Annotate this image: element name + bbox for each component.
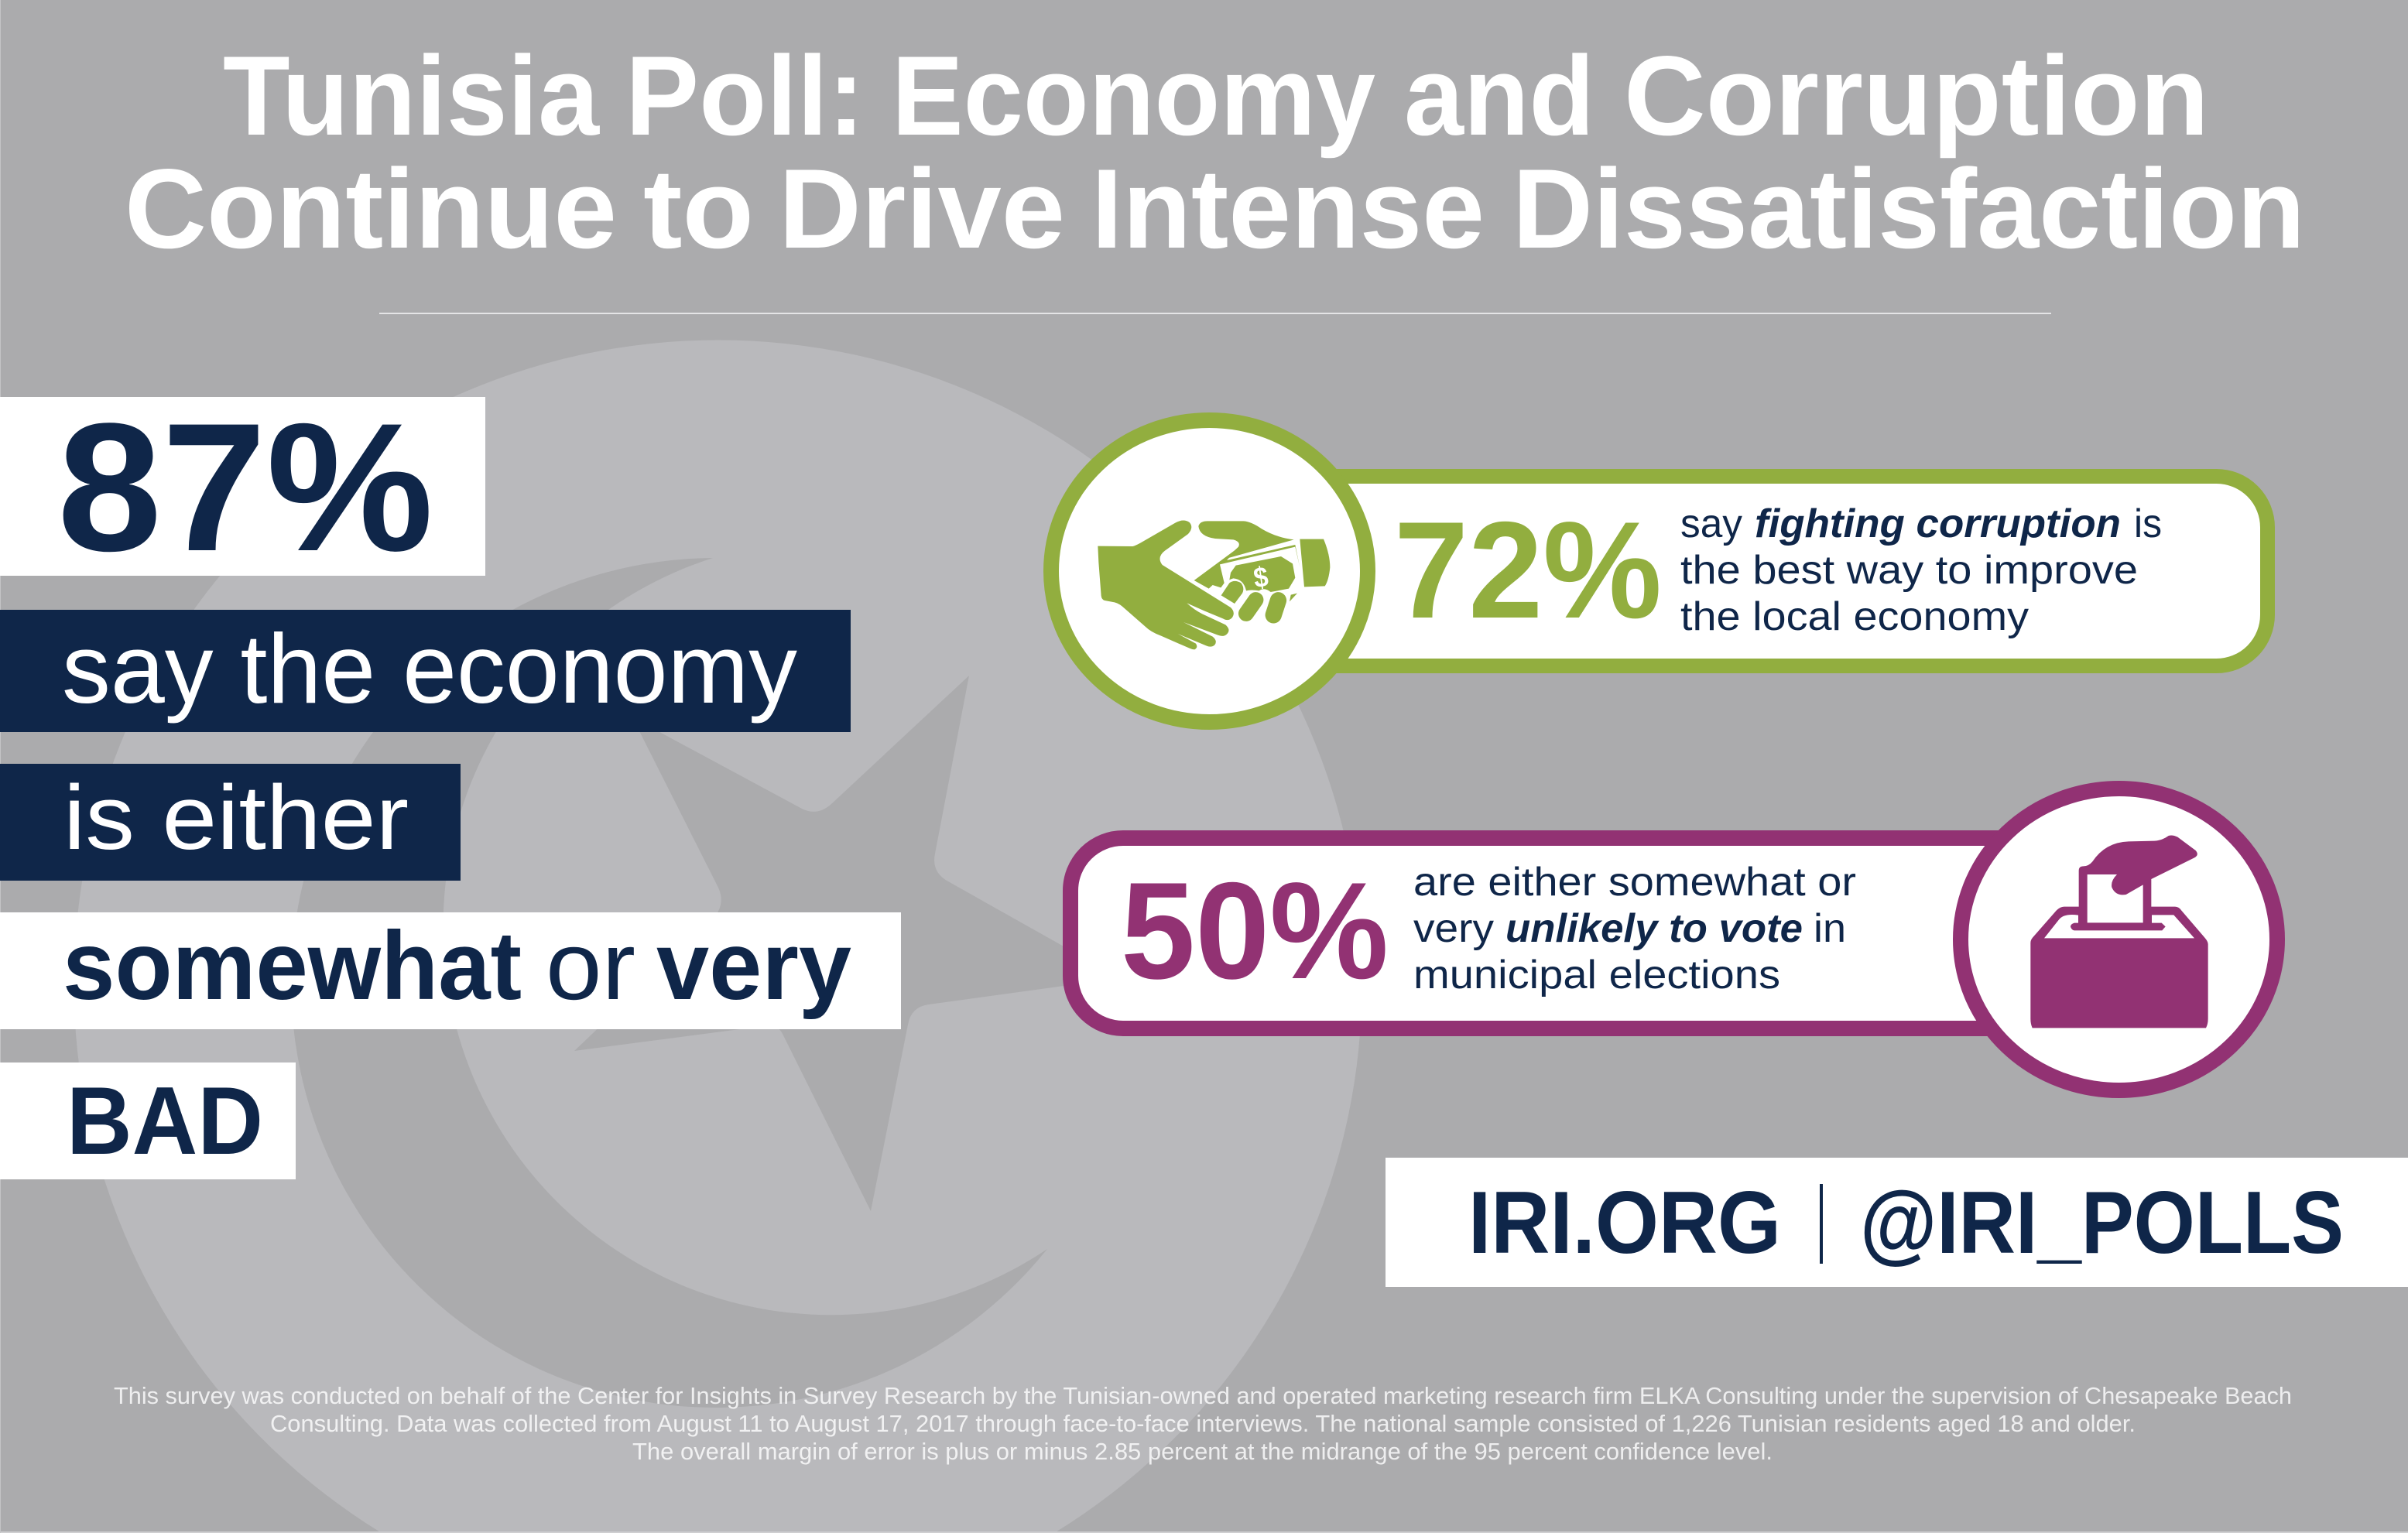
title: Drive <box>779 145 1065 272</box>
corruption text: the local economy <box>1680 594 2029 639</box>
corruption text: fighting corruption <box>1755 501 2121 546</box>
corruption text: is <box>2134 501 2162 546</box>
title: Poll: <box>625 33 865 159</box>
title: and <box>1404 33 1594 159</box>
line: somewhat or very: or <box>546 912 635 1020</box>
87 percent stat: 87% <box>57 385 433 590</box>
icon: ballot box <box>2030 835 2208 1028</box>
72 percent stat: 72% <box>1394 493 1662 647</box>
panel: website and handle: IRI.ORG <box>1468 1174 1781 1272</box>
panel: 87 percent economy statement <box>0 385 901 1179</box>
icon: handshake with money <box>1098 521 1330 649</box>
title <box>125 33 2305 272</box>
voting text: unlikely to vote <box>1505 906 1803 951</box>
voting text: are either somewhat or <box>1413 860 1856 905</box>
voting text: very <box>1413 906 1494 951</box>
corruption text: say <box>1680 501 1742 546</box>
footnote: Consulting. Data was collected from August 11 to August 17, 2017 through face-to-face interviews. The national sample consisted of 1,226 Tunisian residents aged 18 and older. <box>270 1410 2136 1437</box>
title: Corruption <box>1624 33 2209 159</box>
title: to <box>643 145 754 272</box>
title: Intense <box>1091 145 1485 272</box>
voting text <box>1413 860 1856 997</box>
line: somewhat or very <box>0 912 901 1029</box>
panel: 50 percent unlikely to vote <box>1070 789 2277 1090</box>
corruption text <box>1680 501 2162 639</box>
icon: handshake with money: $ <box>1252 561 1270 594</box>
title: Dissatisfaction <box>1512 145 2305 272</box>
title: Economy <box>892 33 1375 159</box>
voting text: in <box>1814 906 1846 951</box>
corruption text: the best way to improve <box>1680 548 2138 593</box>
line: somewhat or very: very <box>656 912 851 1020</box>
purple circle <box>1961 789 2277 1090</box>
title: Tunisia <box>223 33 601 159</box>
panel: website and handle <box>1386 1158 2408 1287</box>
line: somewhat or very: somewhat <box>63 912 522 1020</box>
line: BAD <box>0 1062 296 1179</box>
line: is either: is either <box>63 767 409 869</box>
line: say the economy: say the economy <box>62 614 797 724</box>
title: Continue <box>125 145 617 272</box>
green circle <box>1051 420 1368 722</box>
green pill <box>1238 477 2268 666</box>
panel: website and handle: @IRI_POLLS <box>1860 1174 2344 1272</box>
voting text: municipal elections <box>1413 953 1780 997</box>
footnote: This survey was conducted on behalf of the Center for Insights in Survey Research by the Tunisian-owned and operated marketing research firm ELKA Consulting under the supervision of Chesapeake Beach <box>114 1382 2292 1409</box>
panel: 72 percent fighting corruption <box>1051 420 2268 722</box>
line: is either <box>0 764 461 881</box>
line: BAD: BAD <box>67 1068 263 1175</box>
footnote: The overall margin of error is plus or minus 2.85 percent at the midrange of the 95 percent confidence level. <box>632 1438 1773 1465</box>
purple pill <box>1070 838 2108 1028</box>
50 percent stat: 50% <box>1121 854 1389 1008</box>
footnote <box>114 1382 2292 1465</box>
